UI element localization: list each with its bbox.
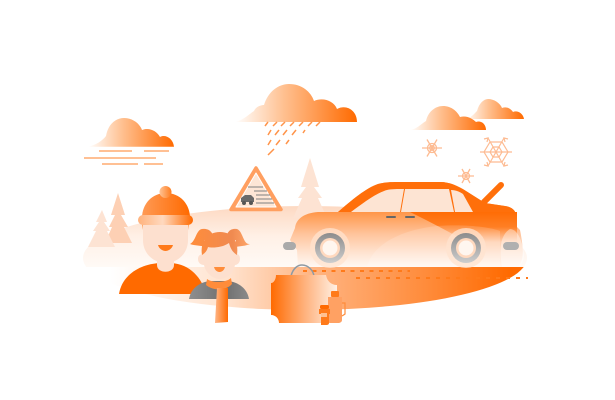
girl: left pigtail (190, 229, 214, 247)
car: orange boot shade (410, 212, 517, 244)
car: front bumper (283, 242, 296, 250)
man: pompom (160, 186, 172, 198)
car: rear light panel (501, 229, 524, 267)
car: door handles (387, 216, 414, 218)
cloud: left with fog (84, 118, 174, 164)
car: orange roof (338, 182, 517, 218)
suitcase: case (271, 275, 337, 323)
person: girl with pigtails (189, 229, 250, 323)
girl: hair (202, 232, 237, 255)
car: body (290, 182, 523, 267)
car (283, 182, 524, 268)
suitcase: handle (291, 265, 314, 276)
girl: body (189, 281, 249, 299)
cloud: rain cloud with rain (235, 84, 357, 155)
girl: mouth (214, 267, 225, 272)
girl: scarf (206, 278, 232, 323)
man: face (143, 222, 188, 263)
suitcase (271, 265, 337, 323)
car: front wheel (310, 228, 350, 268)
icon: large snowflake (480, 138, 512, 166)
ground: snowy hill (83, 206, 527, 310)
winter car travel illustration (83, 84, 528, 325)
car: rear bumper (503, 242, 519, 250)
icon: small snowflake centre (458, 169, 474, 183)
man: shirt (119, 263, 206, 294)
car: windows (351, 189, 473, 212)
road dashes (303, 271, 528, 278)
cloud: far right (465, 99, 524, 119)
man: mouth (158, 245, 173, 251)
icon: small snowflake left (422, 140, 442, 156)
man: hair (142, 222, 189, 238)
thermos (328, 291, 345, 323)
man: hat dome (142, 193, 190, 218)
car: light swoosh (367, 225, 500, 267)
car: raised trunk lid (484, 185, 501, 202)
cloud: near right (410, 106, 486, 130)
girl: right pigtail (226, 229, 250, 247)
road sign: warning triangle (231, 168, 281, 210)
man: hat band (138, 215, 193, 225)
car: rear wheel (446, 228, 486, 268)
cup (319, 305, 330, 325)
girl: face (198, 240, 240, 279)
tree: by the sign (293, 158, 327, 218)
person: man with hat (119, 186, 206, 294)
tree: far left pair (88, 193, 132, 247)
man: neck (157, 258, 174, 272)
